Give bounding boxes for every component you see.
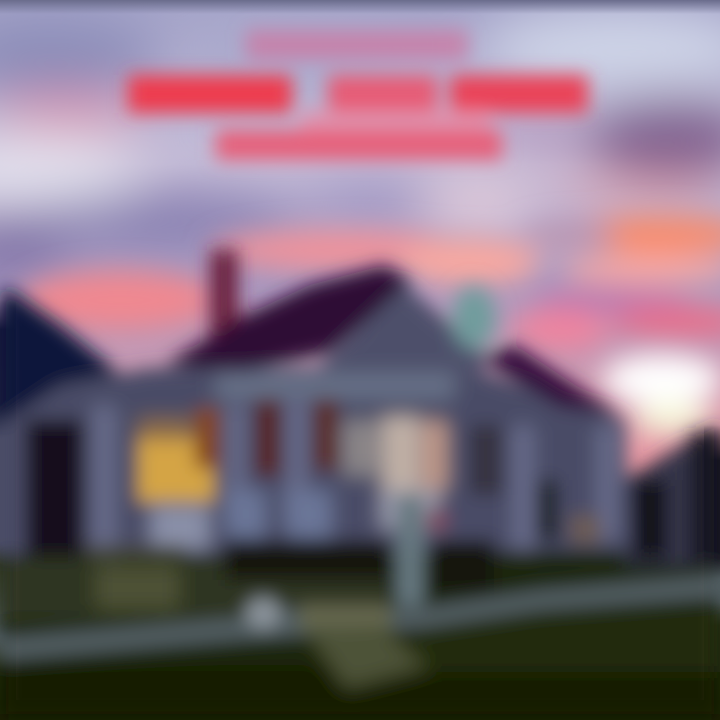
roof left [165, 265, 412, 372]
left edge backdrop [0, 300, 16, 720]
chimney [210, 250, 238, 335]
lit window pale [342, 415, 448, 530]
porch shadow wall [26, 420, 84, 555]
dark door panels [256, 400, 338, 476]
ground: lawn and yard [0, 545, 720, 720]
title line 3 [216, 130, 502, 160]
sky background [0, 0, 720, 434]
title haze [300, 110, 490, 134]
yard sign post [397, 495, 423, 605]
title line 2 [128, 75, 588, 113]
right edge backdrop [704, 425, 720, 720]
columns [92, 400, 618, 555]
lit window yellow [138, 408, 219, 502]
bottom edge backdrop [0, 700, 720, 720]
background house left [0, 290, 118, 475]
title [128, 30, 588, 160]
top edge band [0, 0, 720, 14]
sunset glow [602, 354, 720, 434]
gable [320, 285, 485, 380]
roof right [480, 345, 620, 415]
sidewalk [0, 575, 720, 660]
house body [0, 368, 630, 555]
main house [0, 250, 630, 590]
title line 1 [246, 30, 468, 60]
porch beam [215, 372, 455, 400]
front path [95, 565, 430, 690]
right window [470, 425, 502, 495]
porch steps [150, 490, 332, 550]
dark shrubs and openings [85, 480, 600, 590]
background house right [625, 425, 720, 565]
cupola [452, 286, 496, 350]
